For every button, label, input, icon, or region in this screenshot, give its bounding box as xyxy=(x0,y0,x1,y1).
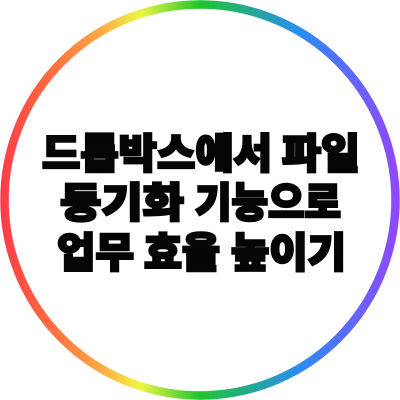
title xyxy=(42,131,360,276)
title line 3: 업무 xyxy=(57,230,134,276)
title line 1: 드롭박스에서 xyxy=(42,131,272,177)
title line 3: 높이기 xyxy=(231,230,346,276)
title line 2: 기능으로 xyxy=(195,180,341,226)
title line 2: 동기화 xyxy=(60,180,184,226)
title line 2 xyxy=(60,180,341,226)
title line 3: 효율 xyxy=(144,230,220,276)
title line 1: 파일 xyxy=(282,131,360,177)
title line 3 xyxy=(57,230,346,276)
